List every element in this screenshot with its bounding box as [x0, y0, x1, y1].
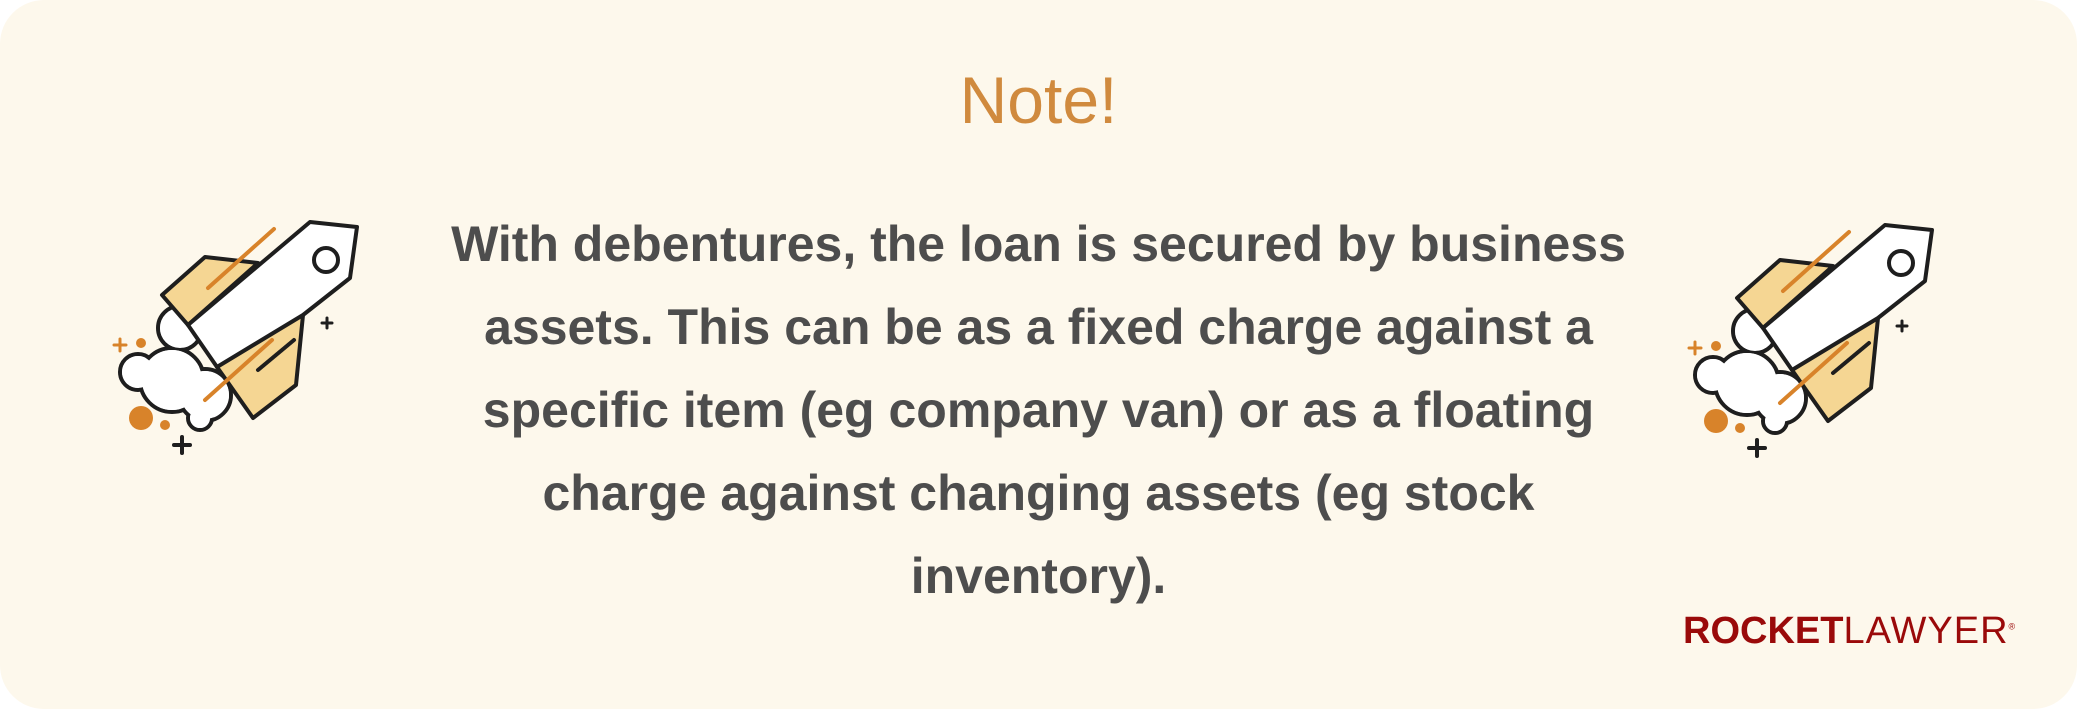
text block: inventory). [911, 548, 1166, 604]
logo: Rocket Lawyer: ROCKETLAWYER® [1683, 610, 2016, 652]
text block: assets. This can be as a fixed charge against a [484, 299, 1593, 355]
text block: With debentures, the loan is secured by business [451, 216, 1626, 272]
icon: rocket right [1688, 223, 1934, 458]
text block [451, 216, 1626, 604]
title: Note! [960, 63, 1117, 137]
text block: charge against changing assets (eg stock [542, 465, 1534, 521]
icon: rocket left [112, 220, 359, 455]
text block: specific item (eg company van) or as a floating [483, 382, 1594, 438]
